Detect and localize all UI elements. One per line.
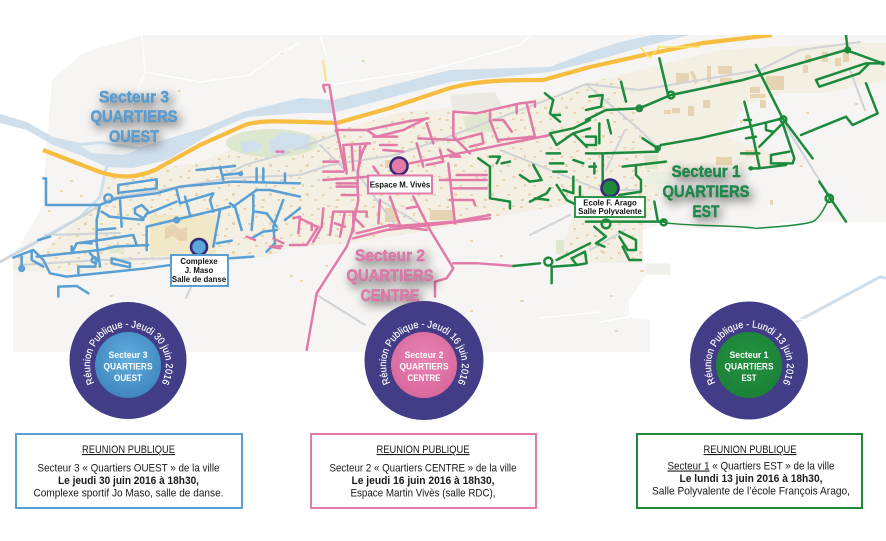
info box: Secteur 2: Espace Martin Vivès (salle RDC), [350, 488, 496, 500]
info box: Secteur 3: REUNION PUBLIQUE [82, 444, 175, 456]
label: Secteur 2: CENTRE [360, 287, 420, 305]
green road network [478, 93, 590, 283]
pin: Complexe J. Maso [171, 239, 228, 286]
badge: Secteur 2 [364, 301, 484, 420]
river [0, 35, 690, 168]
badge: Secteur 1: QUARTIERS [724, 362, 774, 372]
badge: Secteur 3: OUEST [114, 373, 142, 383]
badge: Secteur 3: Réunion Publique - Jeudi 30 juin 2016 [82, 320, 173, 386]
info box: Secteur 1: Secteur 1 « Quartiers EST » de la ville [668, 460, 834, 472]
grey secondary roads [0, 42, 865, 325]
info box: Secteur 2: Le jeudi 16 juin 2016 à 18h30, [352, 475, 494, 487]
label: Secteur 3: Secteur 3 [99, 88, 169, 106]
label: Secteur 1: Secteur 1 [672, 163, 740, 181]
map background [13, 35, 886, 352]
pin: Complexe J. Maso: Complexe [180, 257, 218, 266]
badge: Secteur 2: Réunion Publique - Jeudi 16 juin 2016 [378, 320, 469, 386]
town area [13, 43, 886, 274]
label: Secteur 1: EST [692, 203, 720, 221]
info box: Secteur 3: Le jeudi 30 juin 2016 à 18h30, [58, 475, 199, 487]
label: Secteur 2 [346, 247, 434, 305]
label: Secteur 2: Secteur 2 [355, 247, 425, 265]
pin: Espace M. Vivès: Espace M. Vivès [370, 180, 431, 190]
info box: Secteur 3: Complexe sportif Jo Maso, salle de danse. [34, 488, 224, 500]
side stream [0, 165, 107, 262]
badge: Secteur 2: QUARTIERS [400, 362, 448, 372]
motorway [43, 35, 772, 176]
pin: Espace M. Vivès [368, 158, 432, 194]
yellow access road [323, 60, 326, 81]
map [0, 35, 886, 352]
label: Secteur 2: QUARTIERS [346, 267, 434, 285]
info box: Secteur 3 [16, 434, 242, 508]
info box: Secteur 1: Salle Polyvalente de l’école François Arago, [652, 486, 850, 498]
info box: Secteur 3: Secteur 3 « Quartiers OUEST » de la ville [38, 462, 220, 474]
pin: Ecole F. Arago: Ecole F. Arago [583, 198, 637, 208]
badge: Secteur 1: Secteur 1 [730, 350, 768, 360]
badge: Secteur 3 [70, 302, 186, 419]
east stream [796, 277, 886, 322]
badge: Secteur 2: CENTRE [408, 373, 440, 383]
info box: Secteur 2: Secteur 2 « Quartiers CENTRE » de la ville [330, 462, 516, 474]
pin: Complexe J. Maso: Salle de danse [172, 275, 227, 284]
pin: Ecole F. Arago: Salle Polyvalente [578, 207, 643, 216]
blue road network [13, 166, 300, 297]
info box: Secteur 1: Le lundi 13 juin 2016 à 18h30, [680, 473, 822, 485]
badge: Secteur 1: EST [742, 373, 757, 383]
pin: Ecole F. Arago [575, 180, 645, 217]
label: Secteur 3 [90, 88, 178, 146]
info box: Secteur 2: REUNION PUBLIQUE [376, 444, 470, 456]
rural tracks [130, 35, 820, 322]
badge: Secteur 3: Secteur 3 [108, 350, 148, 360]
label: Secteur 1: QUARTIERS [662, 183, 750, 201]
info box: Secteur 1: REUNION PUBLIQUE [704, 444, 796, 456]
info box: Secteur 2 [311, 434, 536, 508]
label: Secteur 3: QUARTIERS [90, 108, 178, 126]
badge: Secteur 1: Réunion Publique - Lundi 13 juin 2016 [704, 320, 794, 386]
badge: Secteur 1 [690, 302, 808, 420]
label: Secteur 3: OUEST [109, 128, 159, 146]
pin: Complexe J. Maso: J. Maso [185, 266, 214, 275]
badge: Secteur 3: QUARTIERS [104, 362, 152, 372]
pink road network [247, 85, 550, 350]
label: Secteur 1 [662, 163, 750, 221]
river island [80, 144, 138, 155]
lake and park [226, 129, 318, 157]
info box: Secteur 1 [637, 434, 862, 508]
badge: Secteur 2: Secteur 2 [404, 350, 444, 360]
scattered rural buildings [48, 52, 858, 332]
